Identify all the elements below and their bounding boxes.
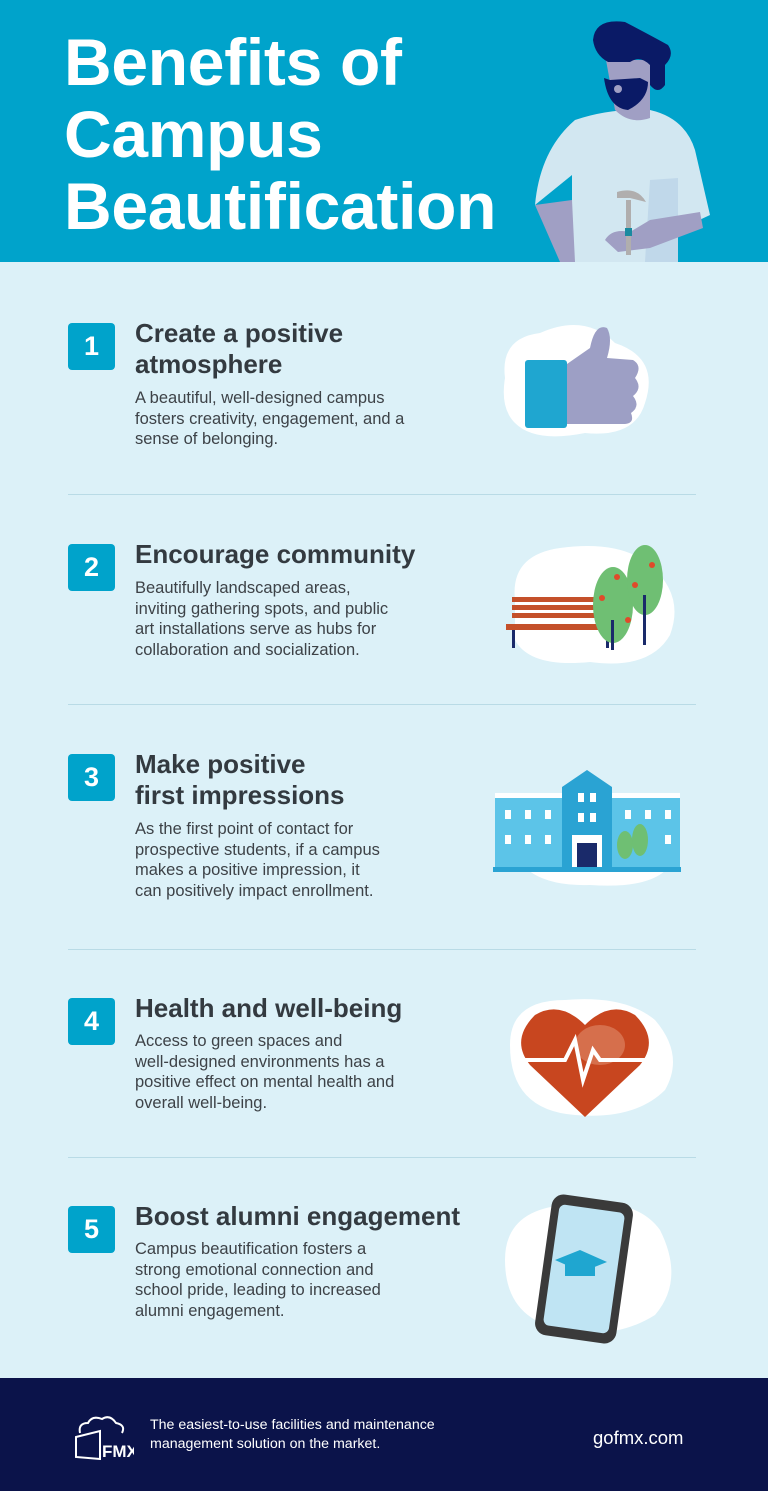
- title: Benefits of: [64, 25, 402, 99]
- heading 4: Health and well-being: [135, 993, 402, 1023]
- text 4: positive effect on mental health and: [135, 1073, 394, 1091]
- section 1: [68, 318, 649, 448]
- text 2: art installations serve as hubs for: [135, 620, 376, 638]
- number 2: 2: [84, 552, 99, 582]
- section 2: [68, 539, 674, 664]
- text 3: As the first point of contact for: [135, 820, 353, 838]
- number 3: [68, 754, 115, 801]
- icon: campus building: [493, 770, 681, 886]
- number 1: [68, 323, 115, 370]
- text 5: Campus beautification fosters a: [135, 1240, 366, 1258]
- text 4: Access to green spaces and: [135, 1032, 342, 1050]
- text 4: overall well-being.: [135, 1094, 267, 1112]
- text 1: sense of belonging.: [135, 430, 278, 448]
- section 4: [68, 993, 673, 1117]
- footer: [0, 1378, 768, 1491]
- divider: [68, 704, 696, 705]
- text 2: inviting gathering spots, and public: [135, 600, 388, 618]
- section 3: [68, 749, 681, 900]
- title: Campus: [64, 97, 323, 171]
- heading 2: Encourage community: [135, 539, 415, 569]
- text 3: [135, 820, 380, 900]
- text 5: alumni engagement.: [135, 1302, 285, 1320]
- number 2: [68, 544, 115, 591]
- heading 1: [135, 318, 343, 379]
- text 4: well-designed environments has a: [135, 1052, 384, 1070]
- heading 1: Create a positive: [135, 318, 343, 348]
- number 3: 3: [84, 762, 99, 792]
- text 5: school pride, leading to increased: [135, 1281, 381, 1299]
- section 5: [68, 1194, 672, 1344]
- icon: bench and trees: [506, 545, 674, 664]
- number 5: 5: [84, 1214, 99, 1244]
- tagline: The easiest-to-use facilities and maintenance: [150, 1417, 435, 1433]
- text 3: can positively impact enrollment.: [135, 882, 373, 900]
- icon: thumbs up: [504, 325, 649, 436]
- icon: phone with grad cap: [505, 1194, 672, 1344]
- title: [64, 25, 496, 243]
- divider: [68, 1157, 696, 1158]
- title: Beautification: [64, 169, 496, 243]
- text 2: [135, 579, 388, 658]
- heading 3: [135, 749, 345, 810]
- header: [0, 0, 768, 262]
- icon: heart: [510, 999, 673, 1117]
- divider: [68, 949, 696, 950]
- number 1: 1: [84, 331, 99, 361]
- text 1: A beautiful, well-designed campus: [135, 389, 384, 407]
- illustration: man with hammer: [535, 21, 710, 262]
- logo: FMX: [75, 1416, 134, 1460]
- tagline: [150, 1417, 435, 1452]
- number 4: 4: [84, 1006, 99, 1036]
- heading 1: atmosphere: [135, 349, 282, 379]
- heading 5: Boost alumni engagement: [135, 1201, 460, 1231]
- divider: [68, 494, 696, 495]
- text 5: [135, 1240, 381, 1320]
- text 4: [135, 1032, 394, 1112]
- number 4: [68, 998, 115, 1045]
- number 5: [68, 1206, 115, 1253]
- text 3: makes a positive impression, it: [135, 861, 360, 879]
- text 5: strong emotional connection and: [135, 1260, 374, 1278]
- text 2: collaboration and socialization.: [135, 640, 360, 658]
- text 2: Beautifully landscaped areas,: [135, 579, 351, 597]
- heading 3: Make positive: [135, 749, 306, 779]
- text 1: fosters creativity, engagement, and a: [135, 410, 404, 428]
- website: gofmx.com: [593, 1427, 683, 1448]
- text 3: prospective students, if a campus: [135, 840, 380, 858]
- text 1: [135, 389, 404, 448]
- tagline: management solution on the market.: [150, 1436, 380, 1452]
- heading 3: first impressions: [135, 780, 345, 810]
